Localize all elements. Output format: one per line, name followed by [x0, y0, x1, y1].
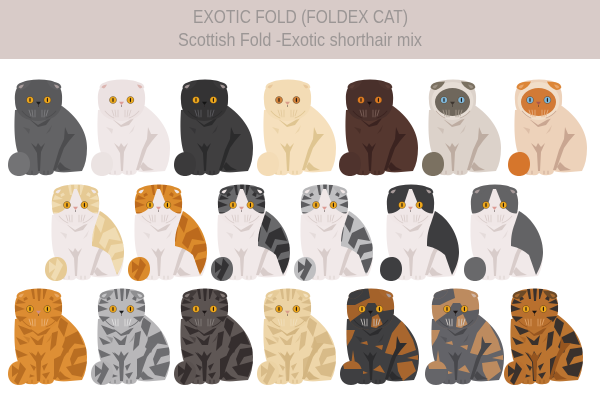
row 2: bicolor cats: [45, 183, 543, 281]
title: EXOTIC FOLD (FOLDEX CAT): [193, 7, 408, 27]
row 3: tabby and tortoiseshell cats: [8, 287, 584, 385]
cat: black and white: [380, 183, 459, 281]
cat: gray: [8, 80, 87, 176]
cat: white: [91, 80, 170, 176]
row 1: solid and colorpoint cats: [8, 80, 587, 176]
cat: cream tabby: [257, 288, 337, 385]
cat: silver tabby: [91, 288, 171, 385]
cat: red point: [508, 80, 587, 176]
cat: black smoke tabby: [174, 288, 254, 385]
cat: black tortoiseshell: [340, 287, 419, 385]
cat: silver tabby and white: [294, 183, 374, 281]
dark left ear: [348, 290, 363, 299]
title banner: [0, 0, 600, 59]
cat: gray and white: [464, 183, 543, 281]
gray left ear: [434, 290, 448, 299]
cat: black tabby and white: [211, 183, 291, 281]
cat: seal point: [422, 80, 501, 176]
cat: cream tabby and white: [45, 183, 125, 281]
cat: black: [174, 80, 253, 176]
cat: chocolate: [339, 80, 418, 176]
cat: red tabby: [8, 288, 88, 385]
subtitle: Scottish Fold -Exotic shorthair mix: [178, 30, 422, 50]
cat: tortoiseshell tabby: [504, 288, 584, 385]
cat: red tabby and white: [128, 183, 208, 281]
cat: cream: [257, 80, 336, 176]
cat: blue tortoiseshell: [425, 287, 504, 385]
